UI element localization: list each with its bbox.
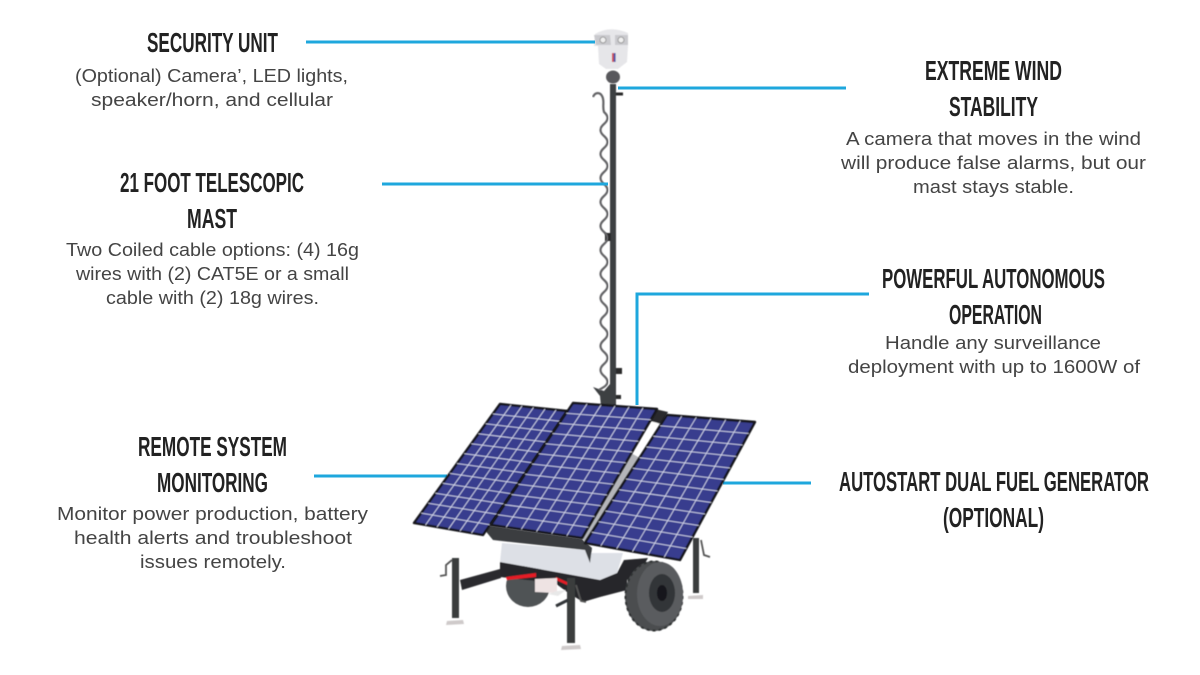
callout: extreme wind stability: STABILITY [949, 91, 1038, 122]
callout: remote system monitoring: Monitor power production, battery [57, 503, 369, 524]
callout: powerful autonomous operation [848, 263, 1141, 377]
callout: extreme wind stability: will produce false alarms, but our [840, 152, 1146, 173]
callout: remote system monitoring: issues remotely. [140, 551, 286, 572]
product: trailer chassis [440, 526, 710, 650]
callout: telescopic mast: wires with (2) CAT5E or a small [75, 263, 349, 284]
product: telescopic mast [593, 84, 623, 406]
product: security unit camera head [594, 29, 628, 84]
callout: telescopic mast: cable with (2) 18g wires. [106, 287, 319, 308]
callout: security unit [75, 27, 348, 110]
callout: extreme wind stability: EXTREME WIND [925, 55, 1062, 86]
callout: remote system monitoring: health alerts and troubleshoot [74, 527, 352, 548]
product: panel support rail [582, 409, 668, 543]
callout: remote system monitoring [57, 431, 369, 572]
callout: remote system monitoring: MONITORING [157, 467, 268, 498]
callout: telescopic mast: MAST [187, 203, 237, 234]
callout: powerful autonomous operation: OPERATION [949, 299, 1042, 330]
jack stands [440, 538, 710, 650]
chassis frame [460, 526, 648, 602]
callout: autostart dual fuel generator [839, 466, 1149, 533]
callout: powerful autonomous operation: Handle any surveillance [885, 332, 1101, 353]
callout: powerful autonomous operation: deployment with up to 1600W of [848, 356, 1141, 377]
product: right solar panel [585, 415, 755, 560]
callout: telescopic mast [66, 167, 359, 308]
product: coiled cable [593, 93, 608, 390]
callout: extreme wind stability: mast stays stable. [913, 176, 1074, 197]
callout: security unit: SECURITY UNIT [147, 27, 278, 58]
red reflectors [506, 573, 567, 585]
callout: extreme wind stability: A camera that moves in the wind [846, 128, 1141, 149]
product: left solar panel [414, 404, 567, 535]
callout: extreme wind stability [840, 55, 1146, 197]
callout: telescopic mast: Two Coiled cable options: (4) 16g [66, 239, 359, 260]
callout: security unit: (Optional) Camera’, LED lights, [75, 65, 348, 86]
callout: remote system monitoring: REMOTE SYSTEM [138, 431, 287, 462]
callout: security unit: speaker/horn, and cellular [91, 89, 333, 110]
license plate [535, 578, 566, 596]
battery box [500, 543, 623, 580]
callout: autostart dual fuel generator: (OPTIONAL) [943, 502, 1044, 533]
connector lines [306, 42, 869, 483]
product: center solar panel [491, 403, 657, 538]
main wheel [625, 561, 683, 631]
rear wheel [506, 565, 550, 607]
callout: telescopic mast: 21 FOOT TELESCOPIC [120, 167, 304, 198]
